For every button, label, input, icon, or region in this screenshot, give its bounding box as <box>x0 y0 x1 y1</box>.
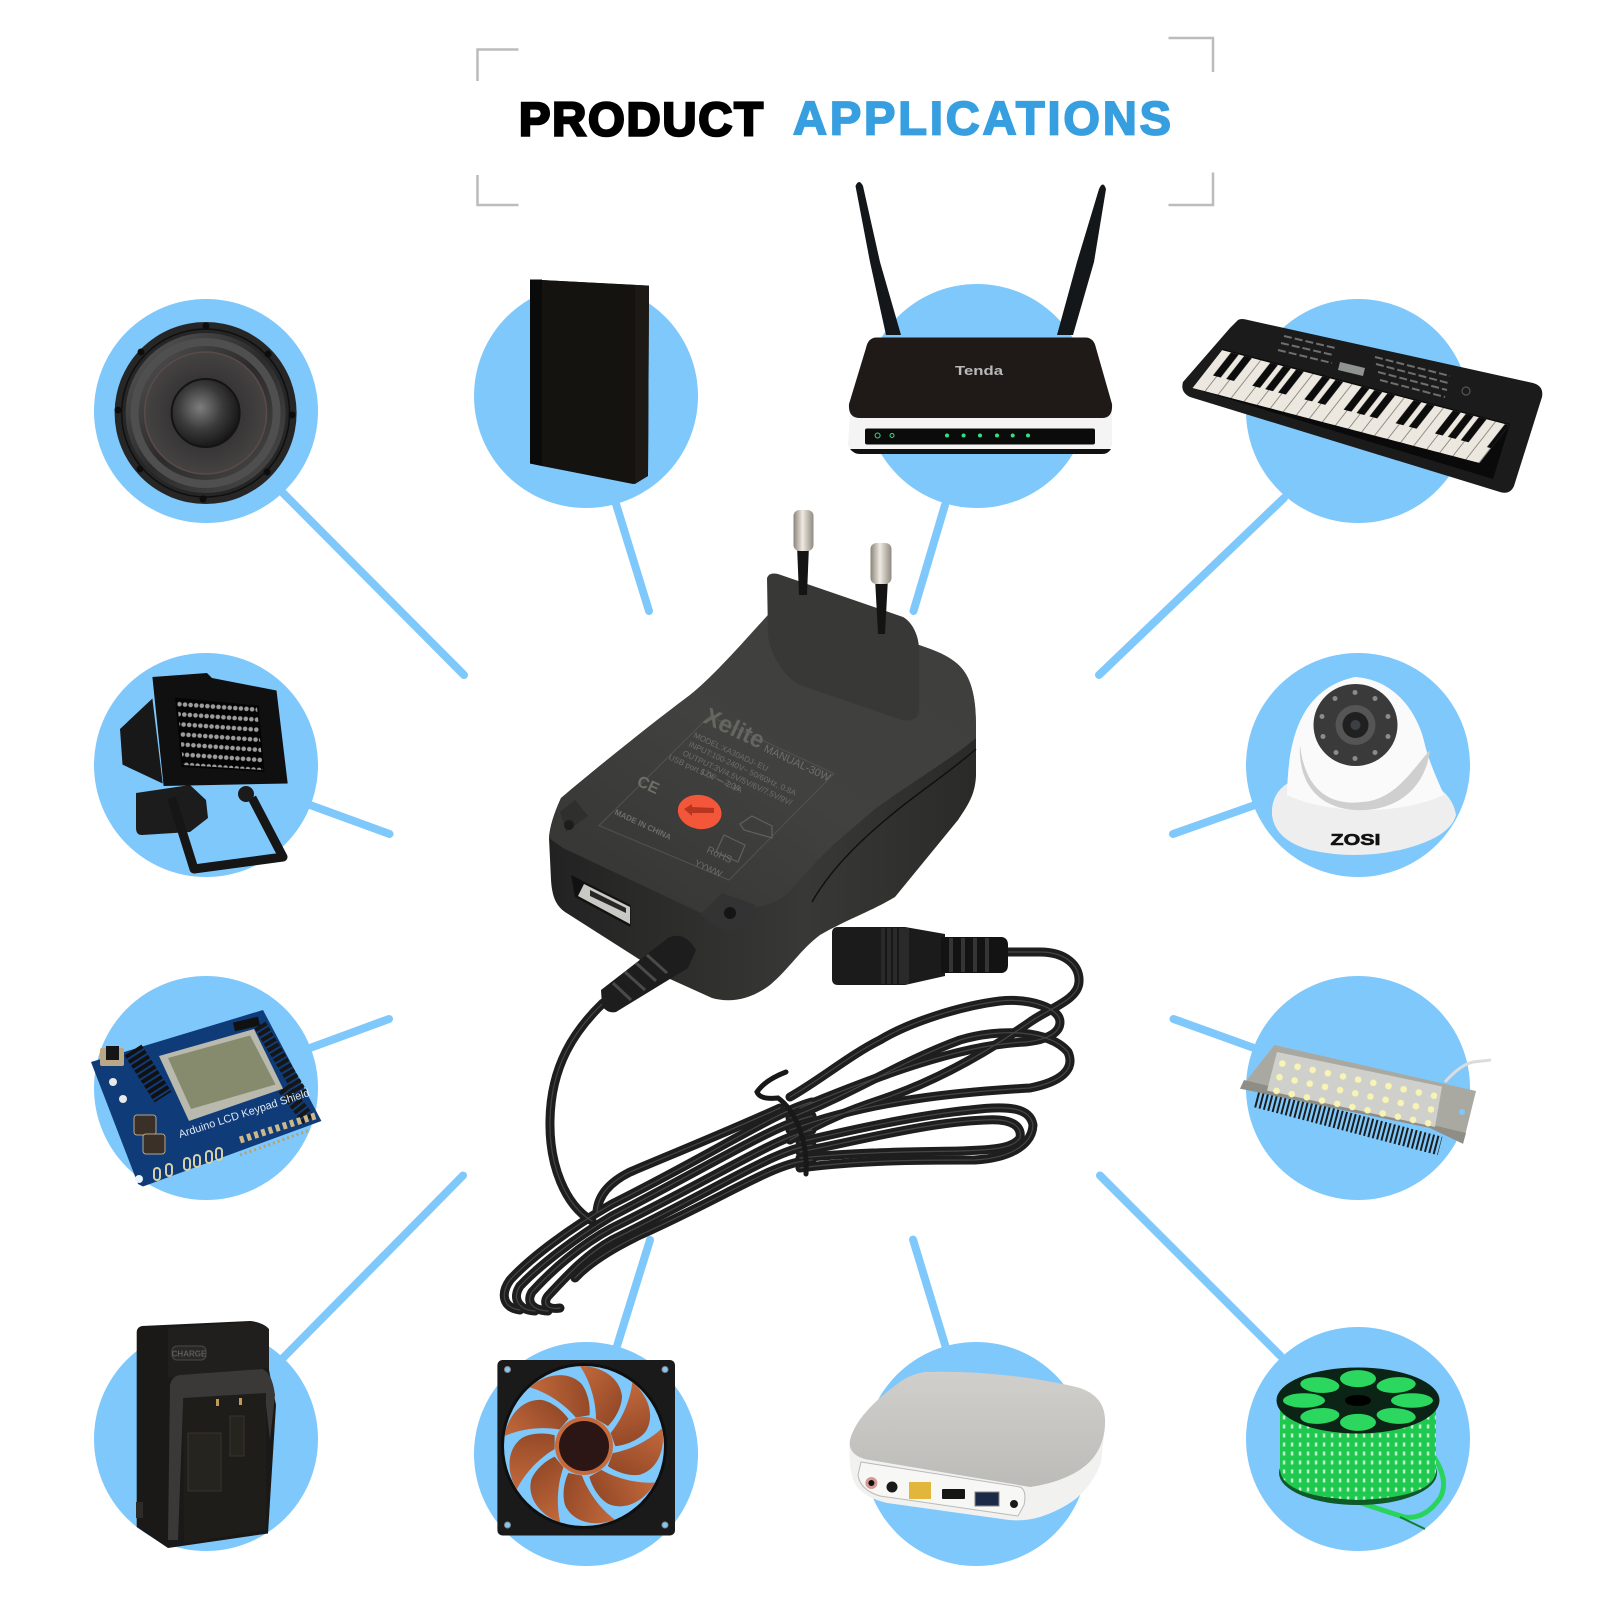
moulded label text: RoHS <box>705 845 734 866</box>
heading: product: PRODUCT <box>519 92 763 146</box>
icon: Arduino LCD keypad shield <box>91 1010 321 1186</box>
orange dial <box>675 791 724 833</box>
adapter body <box>549 615 976 1000</box>
moulded label text: YYWW <box>693 858 724 879</box>
LED grid <box>177 699 263 770</box>
lens housing <box>1314 684 1398 766</box>
pads <box>154 1148 222 1180</box>
reset and keypad buttons <box>100 1048 124 1066</box>
icon: black enclosure box <box>530 280 649 484</box>
brand label: Tenda <box>955 363 1004 378</box>
icon: mini PC <box>849 1372 1105 1520</box>
corner brackets <box>478 38 1213 205</box>
moulded label text: OUTPUT:3V/4.5V/5V/6V/7.5V/9V/ <box>681 749 794 808</box>
dc barrel plug <box>832 927 945 985</box>
moulded label text: INPUT:100-240V~ 50/60Hz, 0.8A <box>687 740 798 798</box>
LEDs <box>1267 1055 1438 1131</box>
mount bracket <box>136 785 208 835</box>
moulded label text: USB port 5.0V — 2.1A <box>667 753 744 795</box>
label area <box>599 716 834 880</box>
strain relief <box>601 936 696 1012</box>
icon: LED module <box>1240 1045 1491 1146</box>
moulded label text: Xelite <box>699 703 769 754</box>
moulded label text: CE <box>634 773 662 798</box>
antennas <box>856 182 901 335</box>
screw bosses <box>700 893 755 932</box>
LCD and panel controls <box>1338 362 1365 376</box>
cable <box>504 952 1079 1311</box>
icon: battery charger: CHARGE <box>172 1350 207 1358</box>
charge badge <box>172 1346 206 1360</box>
heading: applications: APPLICATIONS <box>793 92 1171 144</box>
icon: cooling fan <box>496 1360 675 1536</box>
zip tie <box>757 1072 806 1174</box>
icon: LED strip reel <box>1276 1368 1444 1529</box>
moulded label text: MODEL:XA30ADJ- EU <box>692 731 770 773</box>
moulded label text: MADE IN CHINA <box>613 808 673 842</box>
keys <box>1192 350 1509 463</box>
port panel <box>858 1462 1025 1516</box>
symbols <box>740 816 772 838</box>
front housing <box>152 673 288 786</box>
title block <box>478 38 1213 205</box>
reel top <box>1276 1368 1440 1434</box>
moulded label text: 12V — 2.0A <box>699 767 743 793</box>
brand label: ZOSI <box>1330 832 1380 849</box>
icon: LED flood light <box>120 673 288 869</box>
cable <box>1445 1060 1491 1082</box>
blades <box>496 1360 669 1534</box>
plug base <box>767 574 919 720</box>
connector lines <box>283 493 1284 1358</box>
icon: battery charger <box>136 1321 276 1548</box>
blue circles <box>94 284 1470 1566</box>
moulded label text <box>613 703 833 879</box>
moulded label text: MANUAL-30W <box>762 743 833 784</box>
rear housing <box>120 698 163 784</box>
pins <box>797 545 809 595</box>
usb port <box>571 875 630 927</box>
icon: dome camera <box>1272 677 1456 855</box>
heat sink <box>1257 1098 1440 1146</box>
icon: wifi router <box>848 182 1112 454</box>
board label: Arduino LCD Keypad Shield <box>177 1087 311 1141</box>
coiled strip <box>1280 1400 1436 1500</box>
LCD screen <box>159 1029 283 1121</box>
pin headers <box>260 1025 302 1095</box>
icon: speaker <box>114 322 297 504</box>
top face <box>549 615 976 913</box>
strip tail <box>1361 1454 1444 1517</box>
power adapter with cable <box>504 510 1079 1311</box>
icon: electronic keyboard <box>1182 319 1542 493</box>
